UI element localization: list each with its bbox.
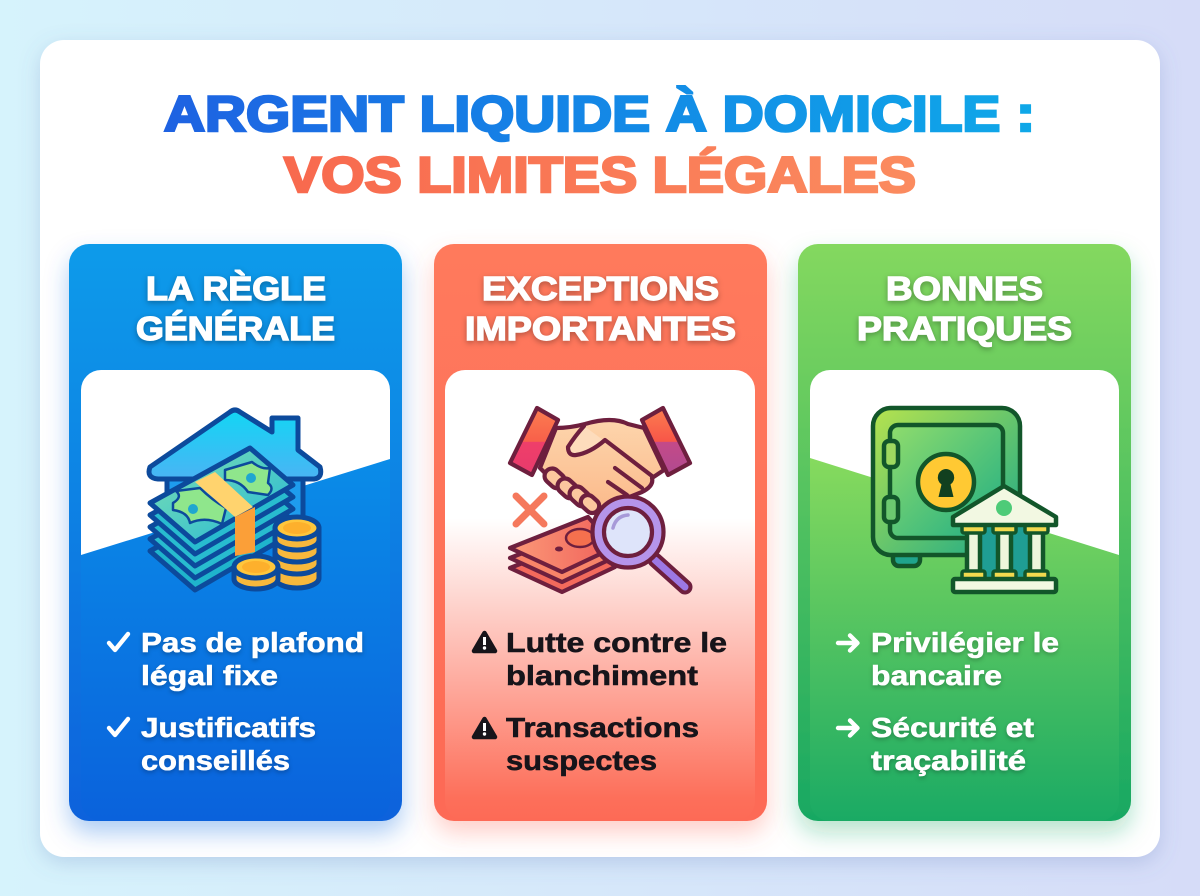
list item: justificatifs: Justificatifs [141,712,316,743]
heading [465,270,736,347]
heading: GÉNÉRALE [136,310,335,347]
coral card background [434,244,767,821]
list item: lutte contre le blanchiment: blanchiment [506,660,698,691]
heading: BONNES [886,270,1043,307]
list item: privilégier le bancaire [871,627,1059,691]
list item: privilégier le bancaire: Privilégier le [871,627,1059,658]
heading: PRATIQUES [857,310,1072,347]
list item: justificatifs: conseillés [141,745,290,776]
icon: arrow 2 [838,720,858,736]
blue card background [69,244,402,821]
list item: pas de plafond [141,627,364,691]
title line 1: ARGENT LIQUIDE À DOMICILE : [164,86,1035,142]
title [164,86,1035,203]
heading: LA RÈGLE [146,270,326,307]
white-to-coral inset [445,370,755,821]
list item: transactions suspectes: Transactions [506,712,699,743]
icon: arrow 1 [838,636,858,650]
list item: sécurité et traçabilité: traçabilité [871,745,1026,776]
panel: exceptions importantes [434,244,767,821]
icon: house with cash and coins [149,410,321,590]
white inset with diagonal [810,370,1119,821]
list item: sécurité et traçabilité [871,712,1034,776]
list item: sécurité et traçabilité: Sécurité et [871,712,1034,743]
list item: justificatifs [141,712,316,776]
list item: transactions suspectes [506,712,699,776]
list item: lutte contre le blanchiment [506,627,727,691]
list item: transactions suspectes: suspectes [506,745,657,776]
icon: handshake, banknotes and magnifier [510,408,690,592]
icon: check mark 2 [109,719,128,735]
heading: EXCEPTIONS [482,270,719,307]
green card background [798,244,1131,821]
icon: safe and bank [873,408,1056,592]
icon: check mark 1 [109,634,128,650]
heading [136,270,335,347]
panel: bonnes pratiques [798,244,1131,821]
list item: privilégier le bancaire: bancaire [871,660,1002,691]
list item: pas de plafond: Pas de plafond [141,627,364,658]
icon: warning 2 [474,719,495,737]
icon: warning 1 [474,633,495,651]
heading [857,270,1072,347]
heading: IMPORTANTES [465,310,736,347]
title line 2: VOS LIMITES LÉGALES [284,147,916,203]
list item: lutte contre le blanchiment: Lutte contre le [506,627,727,658]
panel: la règle générale [69,244,402,821]
white inset with diagonal [81,370,390,555]
list item: pas de plafond: légal fixe [141,660,278,691]
